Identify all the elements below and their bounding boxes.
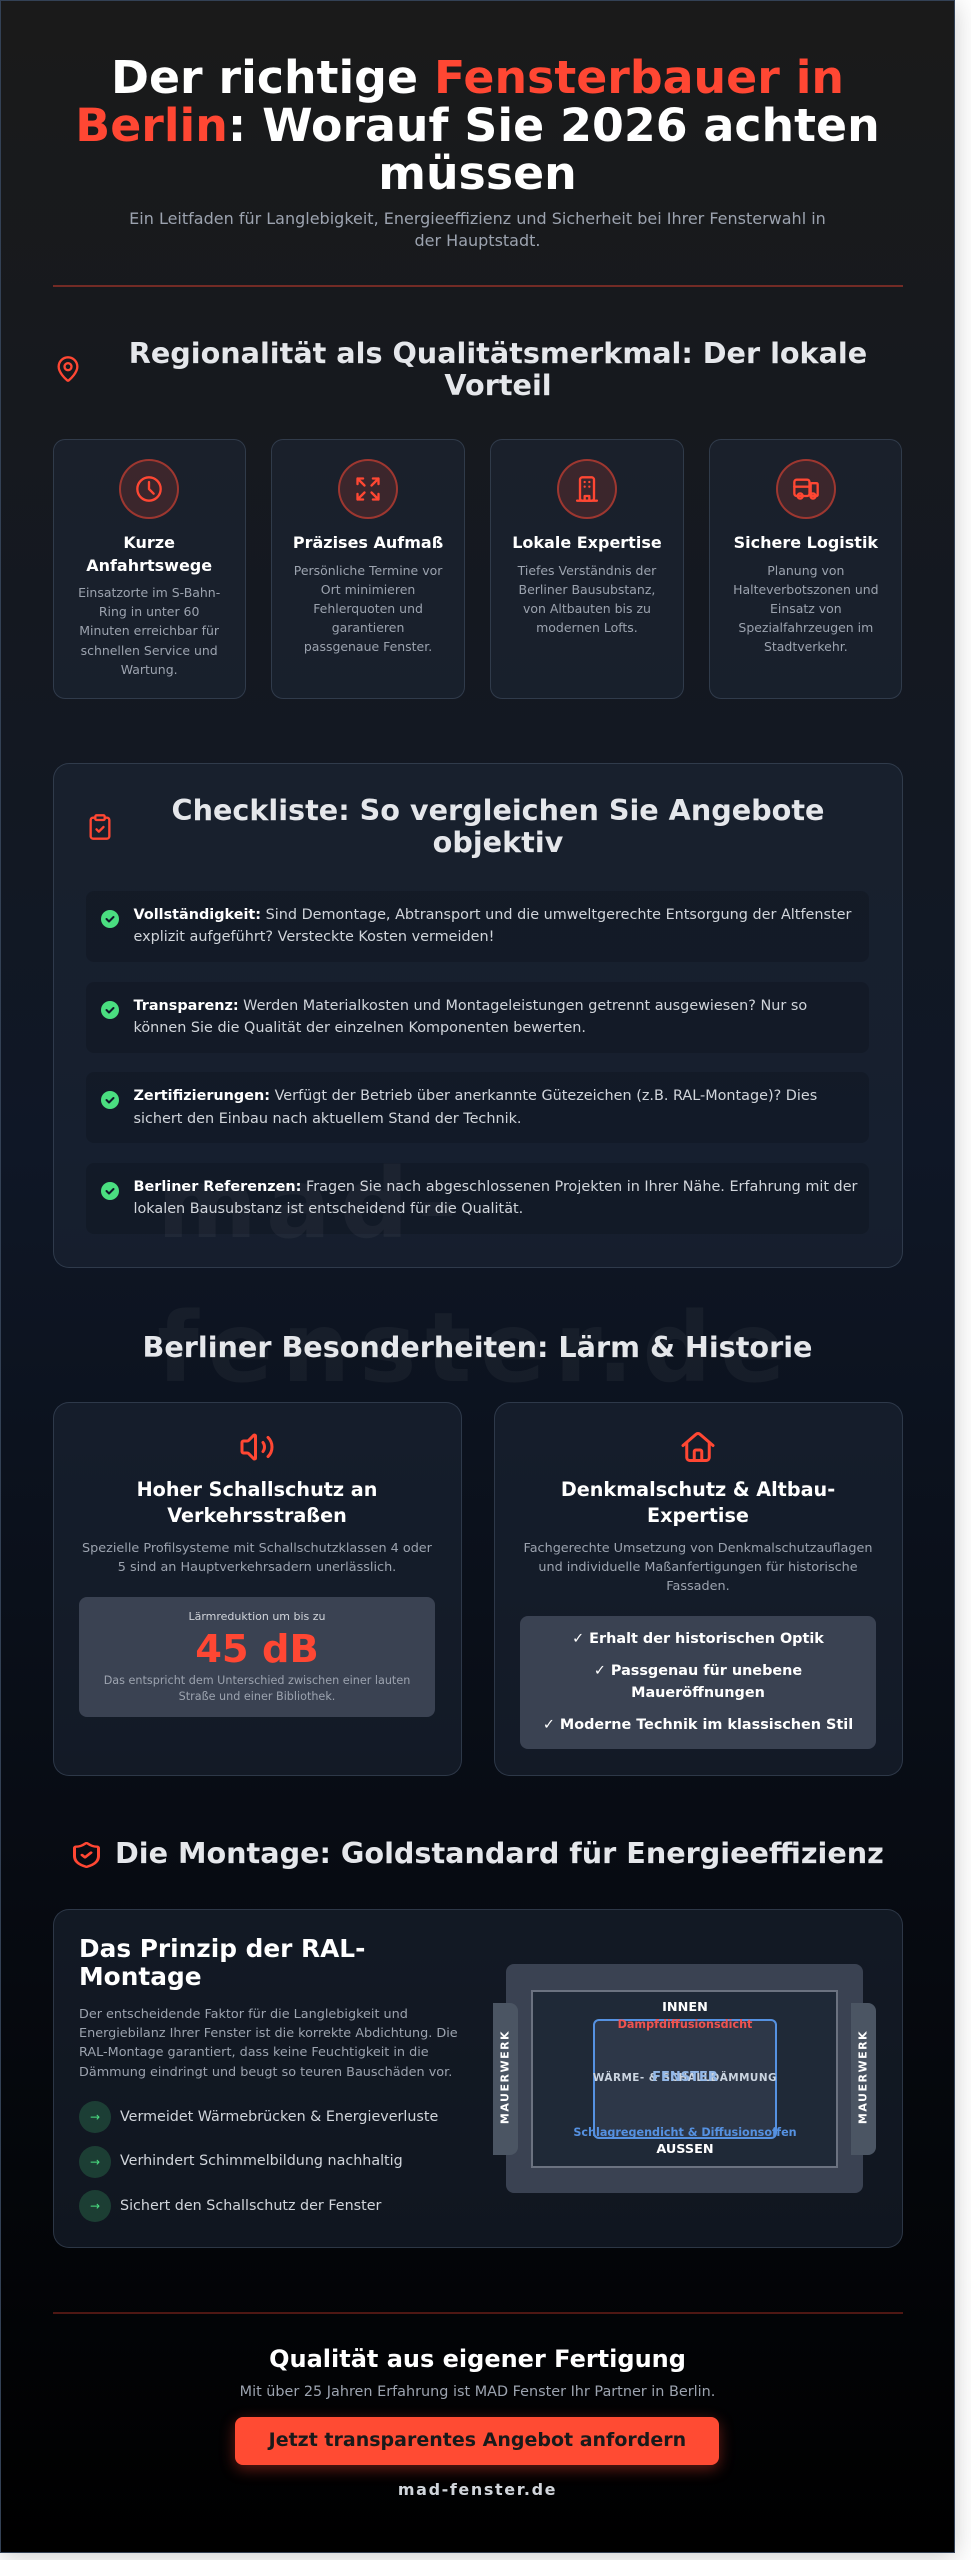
panel title: Denkmalschutz & Altbau- [561, 1478, 835, 1501]
item text: Transparenz: Werden Materialkosten und Montageleistungen getrennt ausgewiesen? Nur so [134, 998, 807, 1014]
title: Berlin: Worauf Sie 2026 achten [75, 98, 880, 152]
card title: Anfahrtswege [86, 556, 212, 575]
panel text [524, 1541, 872, 1594]
list box [520, 1616, 876, 1749]
icon: check [101, 910, 119, 928]
footer divider [52, 2312, 902, 2314]
icon: arrow: → [90, 2199, 100, 2213]
card text [518, 563, 656, 635]
heading: Berliner Besonderheiten: Berliner Besonderheiten: Lärm & Historie [143, 1330, 812, 1364]
heading: checklist: Checkliste: So vergleichen Sie Angebote [172, 793, 824, 827]
card text: Stadtverkehr. [764, 639, 848, 654]
icon: building [557, 459, 617, 519]
panel text: Fassaden. [666, 1579, 730, 1594]
card text: Halteverbotszonen und [733, 582, 879, 597]
card text [733, 563, 879, 654]
panel: RAL-Montage [52, 1909, 902, 2248]
benefit text: Sichert den Schallschutz der Fenster [120, 2198, 381, 2214]
card title: Sichere Logistik [734, 533, 878, 552]
website: mad-fenster.de [398, 2480, 557, 2499]
icon: truck [776, 459, 836, 519]
item text: Berliner Referenzen: Fragen Sie nach abgeschlossenen Projekten in Ihrer Nähe. Erfahrung mit der [134, 1179, 857, 1195]
call to action button: Jetzt transparentes Angebot anfordern [269, 2429, 686, 2451]
benefit 1 [79, 2101, 438, 2133]
card text: Wartung. [121, 662, 178, 677]
benefit 3 [79, 2190, 382, 2222]
item text: explizit aufgeführt? Versteckte Kosten vermeiden! [134, 929, 494, 945]
item text [134, 907, 852, 945]
panel title: Hoher Schallschutz an [137, 1478, 377, 1501]
card text: Fehlerquoten und [313, 601, 423, 616]
title: Der richtige Fensterbauer in [111, 50, 844, 104]
heading: Die Montage: Die Montage: Goldstandard für Energieeffizienz [115, 1836, 884, 1870]
panel: card Präzises Aufmaß [271, 439, 465, 699]
panel: card Sichere Logistik [709, 439, 902, 699]
title: müssen [378, 146, 577, 200]
checklist item: Zertifizierungen [86, 1072, 869, 1143]
watermark: mad- [157, 1148, 466, 1260]
list item: ✓ Passgenau für unebene [594, 1663, 802, 1679]
card title: Lokale Expertise [512, 533, 662, 552]
panel: Denkmalschutz [494, 1402, 902, 1776]
masonry left [493, 2003, 518, 2155]
card text: Persönliche Termine vor [294, 563, 442, 578]
masonry right [851, 2003, 876, 2155]
panel text: und individuelle Maßanfertigungen für historische [538, 1560, 858, 1575]
diagram: window installation [493, 1964, 876, 2193]
heading: Regionalität: Vorteil [444, 368, 552, 402]
label: Innen: INNEN [662, 2000, 708, 2015]
card text: Einsatzorte im S-Bahn- [78, 585, 220, 600]
list item: ✓ Moderne Technik im klassischen Stil [543, 1717, 853, 1733]
diagram outer frame [506, 1964, 863, 2193]
icon: arrow [79, 2146, 111, 2178]
text: RAL title: Das Prinzip der RAL- [79, 1934, 365, 1963]
icon: clock [119, 459, 179, 519]
icon: check [101, 1001, 119, 1019]
item text: sichert den Einbau nach aktuellem Stand der Technik. [134, 1111, 521, 1127]
stat note: Das entspricht dem Unterschied zwischen einer lauten [104, 1674, 410, 1687]
card text: modernen Lofts. [536, 620, 638, 635]
stat note [104, 1674, 410, 1703]
item text [134, 1088, 817, 1127]
item text [134, 1179, 858, 1217]
heading: Regionalität [129, 336, 867, 402]
item text: Zertifizierungen: Verfügt der Betrieb über anerkannte Gütezeichen (z.B. RAL-Montage)? Dies [134, 1088, 817, 1104]
benefit text: Verhindert Schimmelbildung nachhaltig [120, 2153, 403, 2169]
panel title: Expertise [647, 1504, 749, 1527]
icon: arrow: → [90, 2155, 100, 2169]
checklist item: Vollständigkeit [86, 891, 869, 962]
icon: speaker [240, 1434, 274, 1460]
card text: schnellen Service und [81, 643, 218, 658]
icon: check [101, 1091, 119, 1109]
header divider [52, 285, 902, 287]
subtitle: Ein Leitfaden für Langlebigkeit, Energieeffizienz und Sicherheit bei Ihrer Fensterwahl in [129, 209, 826, 228]
panel title [561, 1478, 835, 1527]
icon: arrow: → [90, 2110, 100, 2124]
card text: passgenaue Fenster. [304, 639, 432, 654]
list item: ✓ Erhalt der historischen Optik [572, 1631, 824, 1647]
stat box: 45 dB [79, 1596, 435, 1717]
icon: map pin [58, 356, 78, 382]
footer title: Qualität aus eigener Fertigung [269, 2345, 686, 2373]
card text: Minuten erreichbar für [79, 623, 219, 638]
panel title: Verkehrsstraßen [167, 1504, 347, 1527]
heading: checklist: objektiv [433, 825, 563, 859]
text: RAL description: RAL-Montage garantiert, dass keine Feuchtigkeit in die [79, 2045, 429, 2060]
item text: lokalen Bausubstanz ist entscheidend für die Qualität. [134, 1201, 523, 1217]
icon: arrow [79, 2190, 111, 2222]
diagram inner frame [531, 1990, 838, 2168]
text: RAL description: Der entscheidende Faktor für die Langlebigkeit und [79, 2007, 408, 2022]
window pane [593, 2019, 777, 2139]
card text: Ring in unter 60 [99, 604, 199, 619]
card title: Kurze [123, 533, 175, 552]
label: Fenster: FENSTER [652, 2070, 718, 2085]
panel: Schallschutz [52, 1402, 462, 1776]
card title [86, 533, 212, 575]
title [75, 50, 880, 200]
icon: shield check [73, 1842, 100, 1868]
list item: Maueröffnungen [631, 1685, 765, 1701]
text: RAL description: Energiebilanz Ihrer Fenster ist die korrekte Abdichtung. Die [79, 2026, 458, 2041]
checklist item: Berliner Referenzen [86, 1163, 869, 1234]
card text: garantieren [332, 620, 404, 635]
card text: Einsatz von [770, 601, 842, 616]
card text [294, 563, 442, 654]
watermark [157, 1148, 794, 1404]
masonry right: MAUERWERK [856, 2030, 870, 2124]
stat value: 45 dB [195, 1627, 319, 1672]
panel: checklist [52, 762, 902, 1268]
panel text [82, 1541, 432, 1575]
icon: check [101, 1182, 119, 1200]
panel: card Lokale Expertise [490, 439, 684, 699]
panel: card Kurze Anfahrtswege [52, 439, 246, 699]
card text: von Altbauten bis zu [523, 601, 651, 616]
panel text: Fachgerechte Umsetzung von Denkmalschutzauflagen [524, 1541, 872, 1556]
card text: Tiefes Verständnis der [518, 563, 656, 578]
label: Dampfdiffusionsdicht: Dampfdiffusionsdicht [618, 2018, 752, 2031]
icon: clipboard check [90, 814, 110, 840]
masonry left: MAUERWERK [498, 2030, 511, 2124]
heading: Regionalität: Regionalität als Qualitätsmerkmal: Der lokale [129, 336, 867, 370]
text: RAL description: Dämmung eindringt und beugt so teuren Bauschäden vor. [79, 2065, 452, 2080]
item text: Vollständigkeit: Sind Demontage, Abtransport und die umweltgerechte Entsorgung der Altfenster [134, 907, 851, 923]
stat label: Lärmreduktion um bis zu [188, 1610, 326, 1623]
list item [594, 1663, 802, 1701]
icon: house [681, 1432, 715, 1462]
panel title [137, 1478, 377, 1527]
panel text: Spezielle Profilsysteme mit Schallschutzklassen 4 oder [82, 1541, 432, 1556]
icon: arrow [79, 2101, 111, 2133]
checklist item: Transparenz [86, 982, 869, 1053]
text: RAL description [79, 2007, 458, 2080]
label: Wärme- und Schalldämmung: WÄRME- & SCHALLDÄMMUNG [593, 2072, 777, 2084]
call to action button [235, 2417, 719, 2465]
label: Schlagregendicht: Schlagregendicht & Diffusionsoffen [573, 2126, 797, 2139]
card text [78, 585, 220, 677]
card text: Berliner Bausubstanz, [519, 582, 655, 597]
benefit 2 [79, 2146, 403, 2178]
benefit text: Vermeidet Wärmebrücken & Energieverluste [120, 2109, 438, 2125]
card text: Spezialfahrzeugen im [738, 620, 873, 635]
heading: checklist [172, 793, 824, 859]
item text [134, 998, 807, 1036]
watermark: fenster.de [157, 1292, 794, 1404]
subtitle: der Hauptstadt. [414, 231, 540, 250]
text: RAL title [79, 1934, 365, 1991]
card text: Ort minimieren [321, 582, 415, 597]
item text: können Sie die Qualität der einzelnen Komponenten bewerten. [134, 1020, 586, 1036]
panel text: 5 sind an Hauptverkehrsadern unerlässlich. [118, 1560, 396, 1575]
icon: expand [338, 459, 398, 519]
card title: Präzises Aufmaß [293, 533, 443, 552]
stat note: Straße und einer Bibliothek. [179, 1690, 335, 1703]
text: RAL title: Montage [79, 1962, 202, 1991]
footer text: Mit über 25 Jahren Erfahrung ist MAD Fenster Ihr Partner in Berlin. [240, 2384, 715, 2400]
card text: Planung von [767, 563, 844, 578]
subtitle [129, 209, 826, 250]
label: Aussen: AUSSEN [656, 2142, 714, 2157]
